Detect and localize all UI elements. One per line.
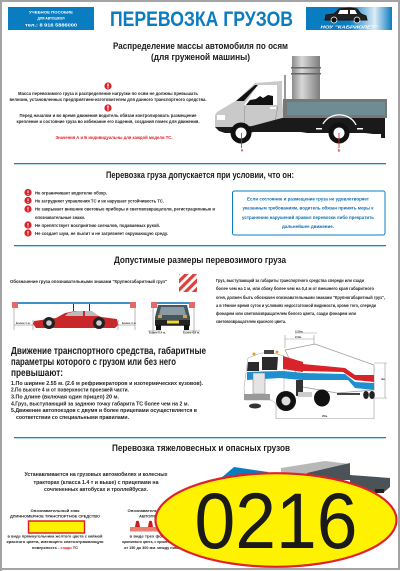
list: limits bbox=[11, 380, 204, 421]
heading: axle load: (для груженой машины) bbox=[151, 52, 250, 62]
illustration: semi truck with dimensions: 2,6м. bbox=[295, 335, 302, 339]
sign: long vehicle: поверхность - сзади ТС bbox=[32, 545, 78, 550]
callout: driver duty: устранению нарушений правил перевозки либо прекратить bbox=[242, 215, 374, 220]
heading: conditions: Перевозка груза допускается при условии, что он: bbox=[106, 170, 294, 180]
illustration: car side view: Более 1 м. bbox=[122, 321, 137, 325]
illustration: car rear view: Более 0,4 м. bbox=[149, 330, 166, 334]
heading: permitted dimensions: Допустимые размеры перевозимого груза bbox=[114, 255, 287, 265]
list: limits: 2.По высоте 4 м от поверхности проезжей части. bbox=[11, 386, 130, 394]
text block: load rules: Масса перевозимого груза и распределение нагрузки по осям не должны превышать bbox=[18, 91, 198, 96]
callout: driver duty: указанным требованиям, водитель обязан принять меры к bbox=[242, 206, 374, 210]
heading: vehicle parameters: Движение транспортного средства, габаритные bbox=[11, 345, 206, 357]
list: conditions: Не препятствует восприятию сигналов, подаваемых рукой. bbox=[35, 223, 160, 228]
illustration: car rear view bbox=[148, 302, 200, 334]
divider bbox=[14, 245, 386, 246]
badge: number 0216 bbox=[156, 473, 396, 567]
list: conditions: опознавательные знаки. bbox=[35, 215, 85, 220]
text block: sign installation: сочлененных автобусах и троллейбусах. bbox=[44, 486, 148, 493]
list: limits: 1.По ширине 2.55 м. (2.6 м рефрижераторов и изотермических кузовов). bbox=[11, 380, 204, 387]
header: logo box: НОУ "КАБРИОЛЕТ" bbox=[320, 24, 379, 30]
sign: road train: АВТОПОЕЗД bbox=[139, 514, 165, 518]
list: conditions bbox=[24, 189, 215, 237]
list: limits: 4.Груз, выступающий за заднюю точку габарита ТС более чем на 2 м. bbox=[11, 400, 190, 408]
illustration: semi truck with dimensions bbox=[244, 330, 387, 419]
illustration: car side view: Более 1 м. bbox=[16, 321, 31, 325]
text block: oversize rules: огня, должен быть обозначен опознавательными знаками "Крупногабаритный груз", bbox=[216, 295, 385, 300]
list: limits: соответствии со специальными правилами. bbox=[16, 415, 130, 421]
illustration: semi truck with dimensions: 20м. bbox=[322, 414, 328, 418]
icon: hatched sign bbox=[179, 274, 197, 292]
heading: axle load: Распределение массы автомобиля по осям bbox=[113, 41, 288, 51]
text block: oversize rules: световозвращателем красного цвета. bbox=[216, 319, 286, 324]
illustration: semi truck with dimensions: 4м. bbox=[381, 377, 386, 381]
divider bbox=[14, 163, 386, 164]
list: limits: 3.По длине (включая один прицеп) 20 м. bbox=[11, 394, 120, 400]
sign: road train: от 150 до 300 мм. между ними bbox=[124, 545, 181, 550]
heading: vehicle parameters: превышают: bbox=[11, 368, 63, 379]
sign: road train bbox=[122, 508, 183, 550]
header: school info box: ДЛЯ АВТОШКОЛ bbox=[38, 16, 65, 20]
list: conditions: Не создает шум, не пылит и не загрязняет окружающую среду. bbox=[35, 231, 168, 236]
header: school info box bbox=[8, 7, 94, 30]
sign: long vehicle: в виде прямоугольника желтого цвета с каймой bbox=[8, 534, 103, 538]
title: ПЕРЕВОЗКА ГРУЗОВ bbox=[110, 7, 293, 31]
text block: load rules: величин, установленных предприятием-изготовителем для данного транспортного средства. bbox=[10, 97, 206, 102]
illustration: heavy cargo vehicle bbox=[221, 461, 390, 493]
heading: heavy and hazardous cargo: Перевозка тяжеловесных и опасных грузов bbox=[112, 443, 290, 453]
sign: long vehicle: красного цвета, имеющего светоотражающую bbox=[6, 539, 104, 544]
header: school info box: тел.: 8 916 5886000 bbox=[25, 22, 78, 28]
illustration: flatbed truck with cylinder bbox=[215, 56, 387, 152]
caption: oversize sign: Обозначение груза опознавательными знаками "Крупногабаритный груз" bbox=[10, 279, 167, 284]
badge: number 0216: 0216 bbox=[194, 476, 358, 565]
sign: road train: Опознавательный знак bbox=[128, 508, 177, 513]
illustration: car side view bbox=[12, 302, 137, 330]
illustration: flatbed truck with cylinder: А bbox=[241, 148, 244, 152]
text block: load rules bbox=[10, 82, 206, 124]
illustration: car rear view: Более 0,4 м. bbox=[183, 330, 200, 334]
header: logo box bbox=[306, 7, 392, 30]
text block: sign installation bbox=[24, 471, 168, 493]
divider bbox=[14, 437, 386, 438]
text block: load rules: Перед началом и во время движения водитель обязан контролировать размещение bbox=[20, 113, 197, 118]
callout: driver duty: Если состояние и размещение груза не удовлетворяет bbox=[247, 196, 370, 202]
sign: road train: оранжевого цвета, с промежутками bbox=[122, 539, 183, 544]
text block: oversize rules: а в тёмное время суток и условиях недостаточной видимости, кроме того, спереди bbox=[216, 303, 376, 308]
sign: long vehicle: Опознавательный знак bbox=[30, 508, 80, 513]
note: red: Значения А и Б индивидуальны для каждой модели ТС. bbox=[56, 135, 172, 140]
illustration: flatbed truck with cylinder: Б bbox=[338, 148, 341, 152]
list: limits: 5.Движение автопоездов с двумя и более прицепами осуществляется в bbox=[11, 407, 197, 414]
header: school info box: УЧЕБНОЕ ПОСОБИЕ bbox=[29, 10, 73, 14]
sign: long vehicle bbox=[6, 508, 104, 550]
list: conditions: Не ограничивает водителю обзор. bbox=[35, 190, 107, 196]
text block: oversize rules: более чем на 1 м, или сбоку более чем на 0,4 м от внешнего края габаритного bbox=[216, 286, 374, 291]
heading: axle load bbox=[113, 41, 288, 62]
text block: oversize rules: фонарем или световозвращателем белого цвета, сзади фонарем или bbox=[216, 311, 356, 316]
sign: road train: в виде трех фонарей bbox=[130, 534, 175, 538]
text block: sign installation: Устанавливается на грузовых автомобилях и колесных bbox=[24, 471, 168, 478]
sign: long vehicle: ДЛИННОМЕРНОЕ ТРАНСПОРТНОЕ СРЕДСТВО bbox=[10, 514, 100, 518]
heading: vehicle parameters bbox=[11, 345, 206, 379]
text block: load rules: крепление и состояние груза во избежание его падения, создания помех для движения. bbox=[16, 119, 200, 124]
list: conditions: Не закрывает внешние световые приборы и световозвращатели, регистрационные и bbox=[35, 206, 215, 212]
heading: vehicle parameters: параметры которого с грузом или без него bbox=[11, 356, 176, 368]
text block: sign installation: тракторах (класса 1.4 т и выше) с прицепами на bbox=[34, 480, 159, 486]
text block: oversize rules: Груз, выступающий за габариты транспортного средства спереди или сзади bbox=[216, 278, 364, 283]
text block: oversize rules bbox=[216, 278, 385, 324]
list: conditions: Не затрудняет управления ТС и не нарушает устойчивость ТС. bbox=[35, 198, 164, 204]
callout: driver duty bbox=[232, 191, 385, 235]
callout: driver duty: дальнейшее движение. bbox=[282, 224, 334, 229]
illustration: semi truck with dimensions: 2,55м. bbox=[295, 330, 304, 334]
